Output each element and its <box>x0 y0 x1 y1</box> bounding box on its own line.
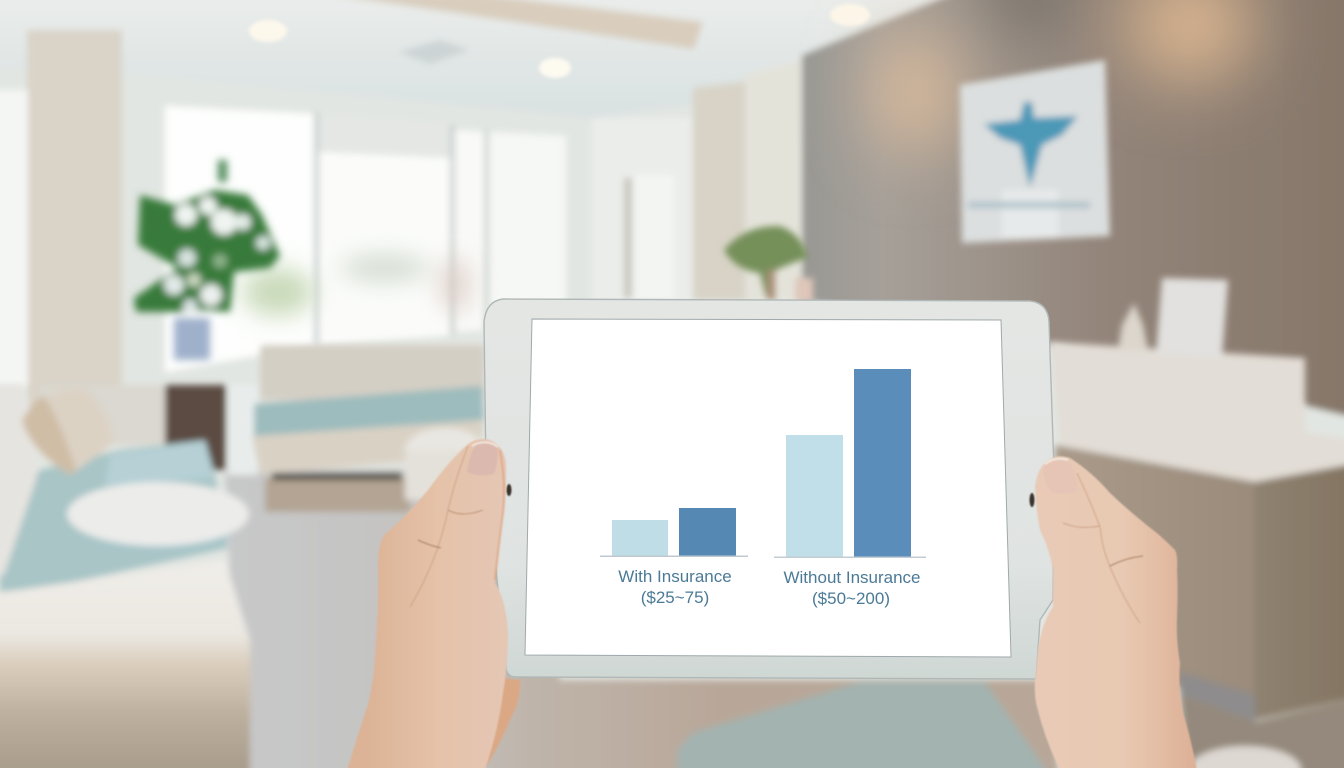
tablet <box>484 299 1054 679</box>
right web crease <box>1110 556 1143 566</box>
left window <box>0 90 28 386</box>
label: with insurance: With Insurance <box>618 567 732 586</box>
right nail tip <box>1045 459 1068 464</box>
far trees <box>242 268 314 316</box>
window middle pane <box>318 115 450 345</box>
back sofa seat <box>254 386 484 438</box>
pillow <box>22 388 112 475</box>
desk bottle <box>1118 303 1148 350</box>
gray wall <box>802 0 1344 420</box>
left hand shape <box>347 439 508 768</box>
desk kick plate <box>1180 672 1255 722</box>
label: without insurance: Without Insurance <box>783 568 921 587</box>
left nail tip <box>472 442 498 447</box>
light right <box>830 4 870 26</box>
bar: without insurance high <box>854 369 911 557</box>
left sofa seat highlight <box>105 441 213 485</box>
baseline right <box>774 556 926 558</box>
round table <box>67 482 249 546</box>
window mullions <box>314 112 319 344</box>
wall sign <box>960 60 1110 243</box>
window right pane <box>454 130 484 332</box>
bar: with insurance high <box>679 508 736 556</box>
tablet screen <box>525 319 1011 657</box>
tablet bezel <box>484 299 1054 679</box>
left sofa cream block <box>0 560 250 768</box>
glow left <box>873 30 957 154</box>
table shadow <box>88 514 232 550</box>
main window glass <box>165 106 316 372</box>
right thumb crease <box>1063 523 1100 527</box>
outside greenery haze <box>242 254 471 316</box>
ottoman <box>405 428 485 472</box>
window far pane <box>489 132 566 325</box>
desk frame <box>1156 278 1228 358</box>
top sprig <box>218 160 227 182</box>
floor tan strip <box>265 478 410 512</box>
floor under desk <box>228 385 258 475</box>
left finger tip <box>506 484 512 496</box>
label: with insurance range: ($25~75) <box>641 588 709 607</box>
left thumb crease <box>448 510 483 514</box>
reception desk top <box>1050 342 1344 482</box>
pillow tan side <box>22 396 76 475</box>
plant foliage <box>134 190 280 312</box>
sign lower sheen <box>1002 190 1058 238</box>
plant bokeh <box>175 204 197 226</box>
reception desk base left face <box>1055 445 1255 700</box>
right thumb nail <box>1043 458 1077 494</box>
left column <box>27 30 122 430</box>
light middle <box>539 58 571 78</box>
bottom white object <box>1189 746 1301 768</box>
bar: without insurance low <box>786 435 843 557</box>
left thumb nail <box>467 441 498 476</box>
plant pot <box>767 270 775 300</box>
sign caption <box>968 202 1090 208</box>
left hand <box>347 439 520 768</box>
right hand <box>1030 456 1197 768</box>
glow right <box>1125 0 1255 83</box>
wall light glow <box>873 0 1255 154</box>
bar chart: without insurance <box>774 369 926 608</box>
vase <box>174 318 210 360</box>
ceiling beam <box>330 0 703 49</box>
light left <box>249 20 287 42</box>
ceiling <box>0 0 1000 118</box>
pedestal <box>165 385 226 470</box>
bar chart: with insurance <box>600 508 748 607</box>
back wall behind pillow <box>40 385 165 445</box>
potted plant with bokeh <box>134 160 280 360</box>
left sofa teal <box>0 440 228 592</box>
window shade <box>318 115 450 158</box>
right finger line <box>1077 473 1140 623</box>
back wall door <box>592 118 692 308</box>
left web crease <box>418 540 441 548</box>
right hand shape <box>1035 456 1197 768</box>
baseline left <box>600 556 748 557</box>
right finger tip <box>1030 493 1034 507</box>
wall dark corner <box>980 0 1080 25</box>
floor right <box>1180 695 1344 768</box>
bar: with insurance low <box>612 520 668 556</box>
ceiling vent <box>398 40 470 64</box>
floor <box>225 470 1060 768</box>
front bench <box>676 682 1060 768</box>
plant by wall <box>724 226 808 297</box>
left sofa arm <box>0 385 36 575</box>
left finger line <box>410 446 468 607</box>
left thumb edge shade <box>495 450 504 580</box>
ceiling lights <box>249 4 870 78</box>
column by wall <box>693 82 745 300</box>
sign caduceus <box>984 102 1078 188</box>
back sofa base <box>252 420 484 474</box>
reception desk base right face <box>1255 462 1344 720</box>
left rear fingers <box>470 678 520 768</box>
back sofa backrest <box>260 345 485 400</box>
label: without insurance range: ($50~200) <box>812 589 890 608</box>
back sofa dark gap <box>272 473 402 480</box>
